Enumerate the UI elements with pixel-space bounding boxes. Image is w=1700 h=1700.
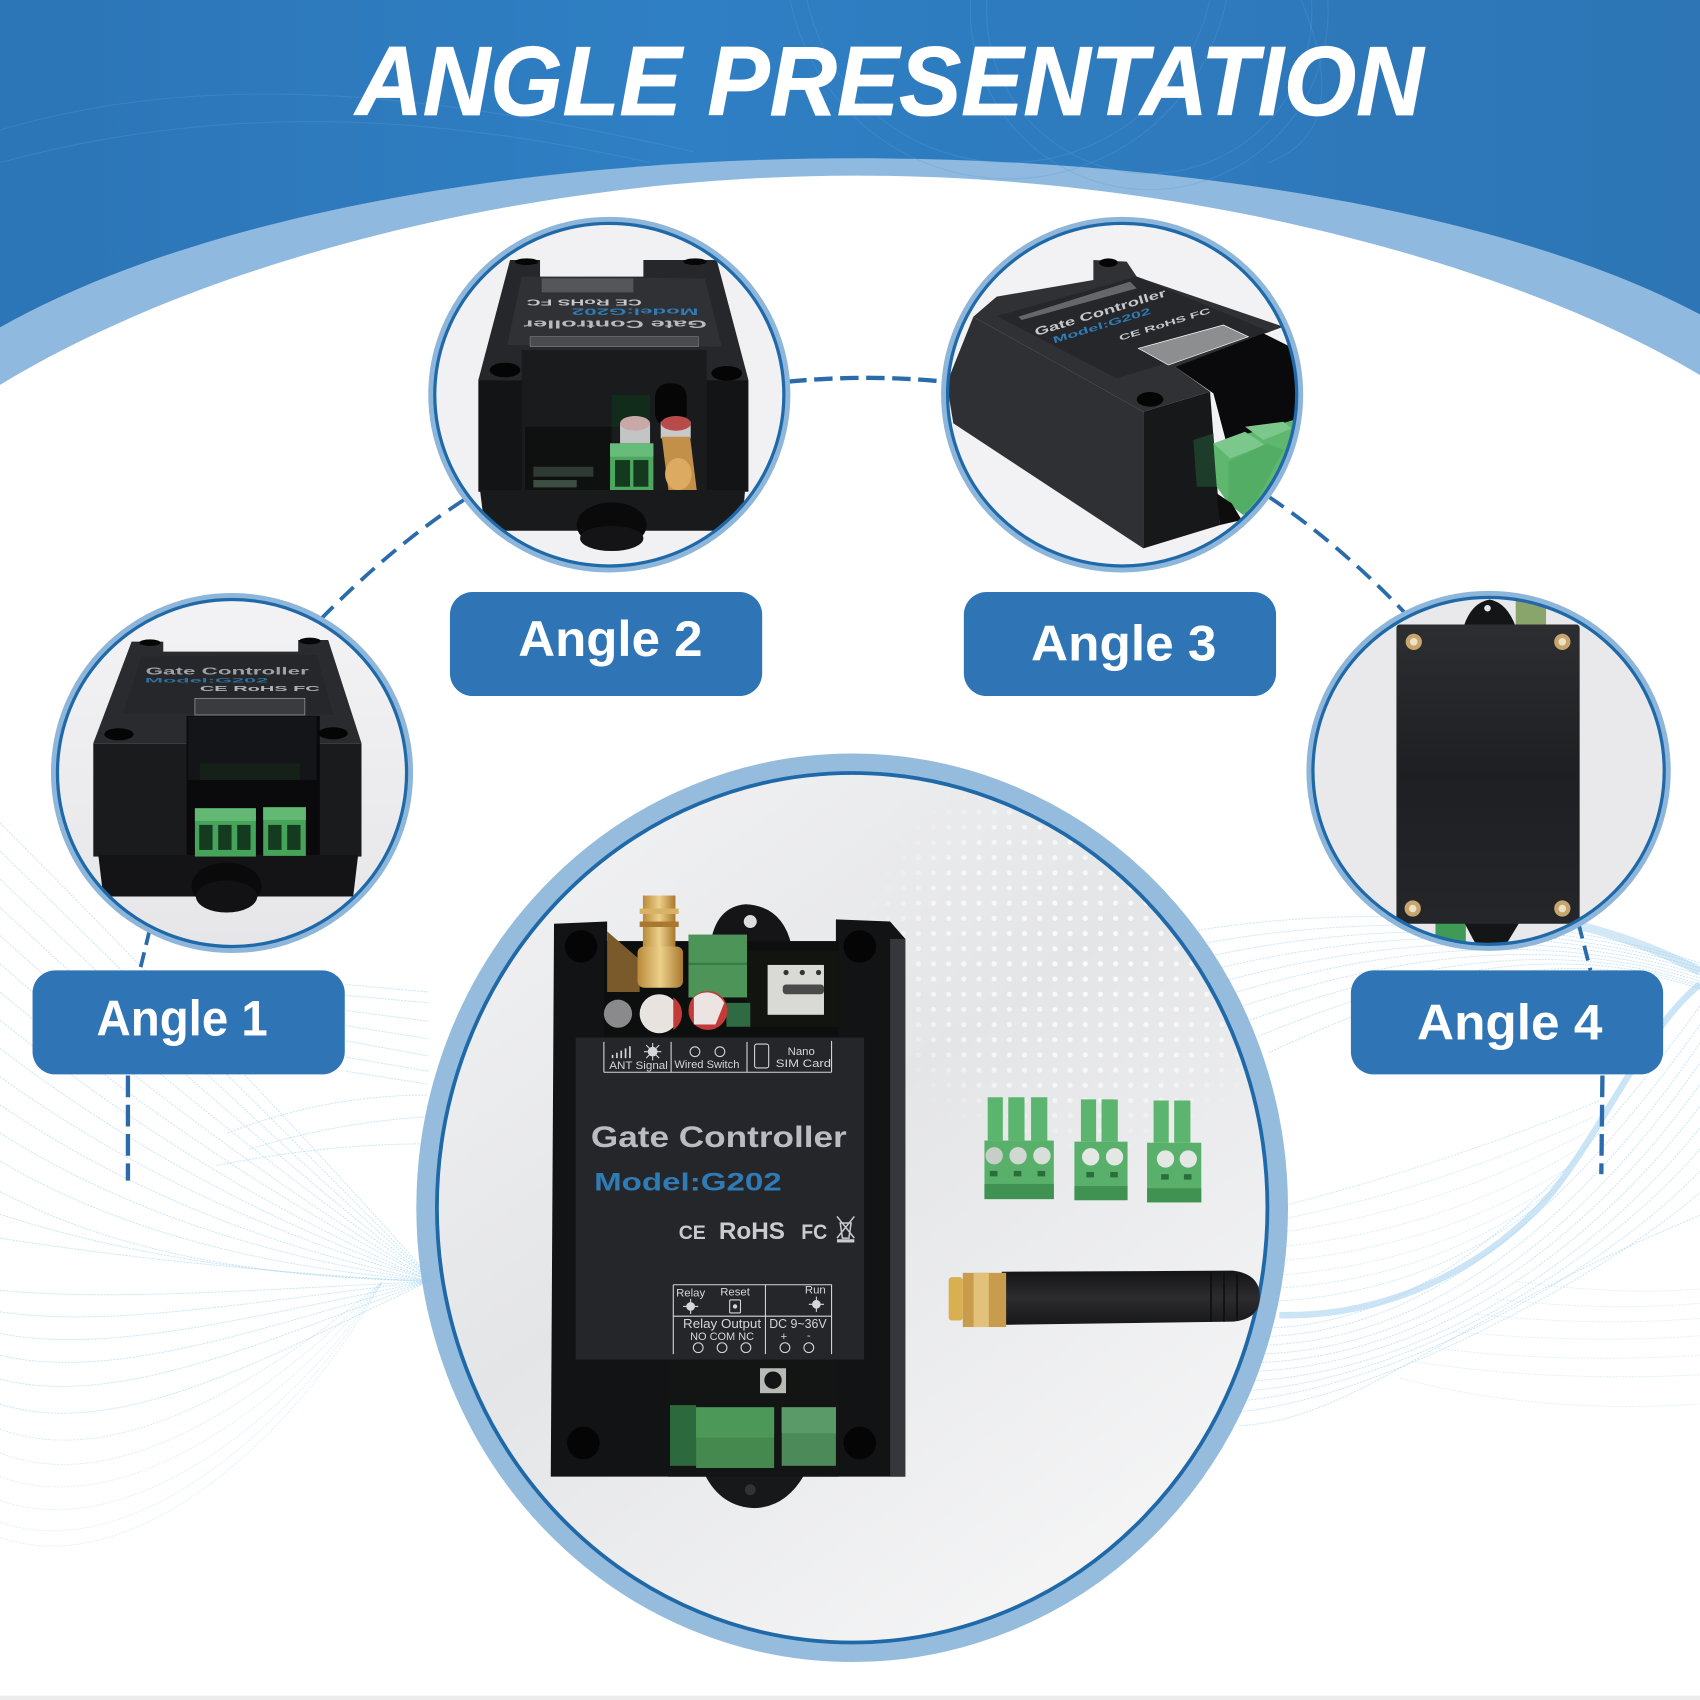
connector: two pole <box>1147 1100 1201 1202</box>
enclosure side <box>890 939 905 1477</box>
model number: Model:G202 <box>594 1168 782 1196</box>
label: angle 3: Angle 3 <box>1031 615 1216 671</box>
circle: angle 1 <box>54 596 410 950</box>
product name: Gate Controller <box>591 1122 847 1154</box>
bottom info table: Relay Output <box>683 1317 762 1331</box>
dashed connector: angle 1 to label <box>140 930 150 970</box>
angle 2: device view: CE RoHS FC <box>526 297 642 306</box>
angle 2: pale ring <box>432 220 787 569</box>
dashed connector: angle 1 label downward <box>126 1076 130 1181</box>
header band: blue arc <box>0 0 1700 327</box>
angle 1: backdrop <box>57 600 407 946</box>
header band: pale arc <box>0 0 1700 385</box>
enclosure body <box>551 919 905 1477</box>
reset button <box>760 1368 786 1393</box>
bottom info table: Reset <box>720 1287 751 1299</box>
main circle: dark ring <box>437 773 1267 1643</box>
antenna <box>949 1271 1260 1327</box>
label: angle 1: Angle 1 <box>96 990 268 1046</box>
bottom info table: Run <box>805 1284 826 1296</box>
main circle: backdrop <box>437 773 1267 1643</box>
circle: angle 2 <box>432 220 787 569</box>
angle 1: device view: Gate Controller <box>146 667 309 678</box>
top info table: ANT Signal <box>609 1060 668 1072</box>
angle 4: backdrop <box>1313 597 1664 944</box>
label: angle 4 <box>1351 970 1663 1074</box>
angle 2: dark ring <box>435 223 784 566</box>
top info table: SIM Card <box>776 1058 831 1070</box>
pcb and sim holder <box>726 951 839 1027</box>
angle 3: device view <box>947 258 1303 548</box>
dashed connector: angle 3 to angle 4 <box>1268 497 1414 622</box>
circle: angle 4 <box>1310 594 1667 952</box>
angle 3: device view: CE RoHS FC <box>1118 306 1212 343</box>
gate controller device <box>551 896 905 1508</box>
label: angle 4: Angle 4 <box>1417 995 1603 1051</box>
certification marks: CE <box>679 1222 706 1244</box>
angle 1: dark ring <box>57 600 407 946</box>
top info table <box>604 1041 832 1072</box>
bottom recess pcb <box>668 1361 839 1477</box>
top info table: Wired Switch <box>674 1059 739 1071</box>
certification marks: FC <box>801 1219 828 1244</box>
bottom info table: DC 9~36V <box>769 1317 827 1331</box>
angle 1: device view: Model:G202 <box>145 677 269 684</box>
angle 2: backdrop <box>435 223 784 566</box>
bottom info table: - <box>807 1330 811 1342</box>
angle 1: device view <box>93 638 361 913</box>
connector: two pole <box>1074 1099 1128 1200</box>
angle 4: dark ring <box>1313 597 1664 944</box>
dashed connector: angle 4 to label <box>1579 924 1590 970</box>
angle 1: pale ring <box>54 596 410 950</box>
angle 3: backdrop <box>948 223 1297 566</box>
angle 2: device view: Model:G202 <box>572 307 698 317</box>
capacitors <box>604 991 727 1033</box>
angle 2: device view: Gate Controller <box>522 318 707 330</box>
green terminal block <box>688 935 747 997</box>
bottom info table: + <box>781 1331 788 1343</box>
dashed connector: angle 4 label downward <box>1601 1076 1602 1174</box>
title: ANGLE PRESENTATION <box>353 26 1425 136</box>
dashed connector: angle 2 to angle 3 <box>788 378 944 382</box>
bottom info table: Relay <box>676 1288 705 1300</box>
label: angle 2 <box>450 592 762 696</box>
angle 3: device view: Gate Controller <box>1033 287 1169 339</box>
bottom info table: NO COM NC <box>690 1331 754 1343</box>
label: angle 1 <box>33 970 345 1074</box>
loose terminal connectors <box>984 1097 1201 1202</box>
angle 3: pale ring <box>944 220 1300 569</box>
bottom mounting tab <box>705 1474 804 1508</box>
antenna connector back plate <box>607 931 640 992</box>
wave pattern: right <box>1198 916 1700 1426</box>
top info table: Nano <box>788 1046 815 1058</box>
circle: angle 3 <box>944 220 1303 569</box>
main circle: dot texture <box>901 810 1224 1118</box>
top mounting tab <box>710 904 791 945</box>
angle 4: device view <box>1396 598 1580 952</box>
angle 3: dark ring <box>948 223 1297 566</box>
certification marks <box>679 1216 854 1245</box>
bottom info table <box>673 1284 832 1354</box>
label: angle 3 <box>964 592 1276 696</box>
wave pattern: left <box>0 823 428 1546</box>
bottom terminal blocks <box>670 1405 836 1468</box>
main product circle <box>426 748 1312 1652</box>
connector: three pole <box>984 1097 1054 1199</box>
top recess with pcb <box>604 941 839 1036</box>
angle 2: device view <box>478 258 748 551</box>
front label panel <box>576 1038 864 1360</box>
angle 3: device view: Model:G202 <box>1052 306 1152 345</box>
gold sma connector <box>638 896 683 988</box>
label: angle 2: Angle 2 <box>518 611 703 667</box>
angle 4: pale ring <box>1310 594 1667 948</box>
dashed connector: angle 2 to angle 1 <box>317 500 464 623</box>
screw holes <box>565 915 876 1495</box>
certification marks: RoHS <box>719 1218 785 1245</box>
main circle: pale ring <box>426 763 1278 1652</box>
angle 1: device view: CE RoHS FC <box>200 684 322 693</box>
